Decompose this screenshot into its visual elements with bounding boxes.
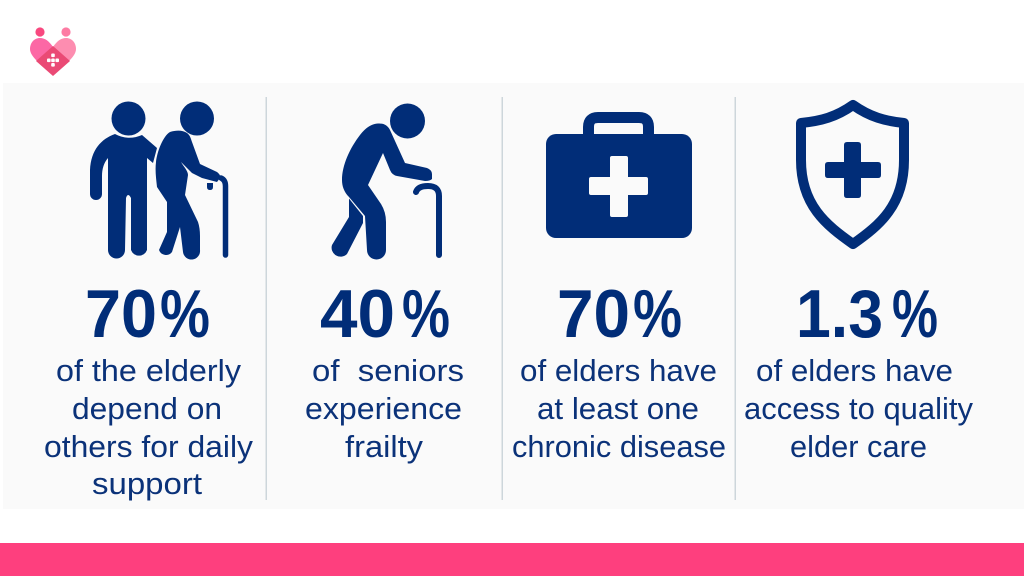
description: daily support	[44, 353, 254, 501]
stat: 70%: %	[633, 276, 682, 352]
stat column 3	[512, 118, 726, 464]
icon: frail stooped person with cane	[332, 104, 439, 260]
icon: two elderly people with cane	[90, 102, 226, 260]
footer bar	[0, 543, 1024, 576]
description: daily support: others for daily	[44, 429, 254, 464]
description: access to quality care	[744, 353, 973, 464]
icon: shield with cross	[801, 105, 904, 244]
stat: 70%: 70	[557, 276, 630, 352]
stat: 40%: %	[402, 276, 450, 352]
stat: 40%: 40	[320, 276, 395, 352]
description: frailty: of seniors	[312, 353, 464, 388]
description: access to quality care: of elders have	[756, 353, 953, 388]
main panel	[3, 83, 1024, 509]
description: daily support: of the elderly	[56, 353, 242, 388]
stat: 40%	[320, 276, 450, 352]
description: chronic disease: at least one	[537, 391, 699, 426]
description: daily support: support	[92, 466, 202, 501]
description: frailty: frailty	[345, 429, 424, 464]
description: chronic disease	[512, 353, 726, 464]
description: access to quality care: access to quality	[744, 391, 973, 426]
stat: 70%	[85, 276, 210, 352]
description: chronic disease: of elders have	[520, 353, 717, 388]
stat: 70%: %	[160, 276, 210, 352]
icon: medical briefcase	[546, 118, 692, 238]
description: chronic disease: chronic disease	[512, 429, 726, 464]
stat: 70%: 70	[85, 276, 157, 352]
stat column 4	[744, 105, 973, 464]
stat: 70%	[557, 276, 682, 352]
stat: 1.3%: %	[892, 276, 938, 352]
description: frailty: experience	[305, 391, 462, 426]
stat column 2	[305, 104, 464, 464]
description: frailty	[305, 353, 464, 464]
description: daily support: depend on	[72, 391, 222, 426]
stat: 1.3%	[796, 276, 938, 352]
stat column 1	[44, 102, 254, 501]
logo: heart with figures and medical cross	[30, 27, 76, 76]
description: access to quality care: elder care	[790, 429, 927, 464]
stat: 1.3%: 1.3	[796, 276, 883, 352]
